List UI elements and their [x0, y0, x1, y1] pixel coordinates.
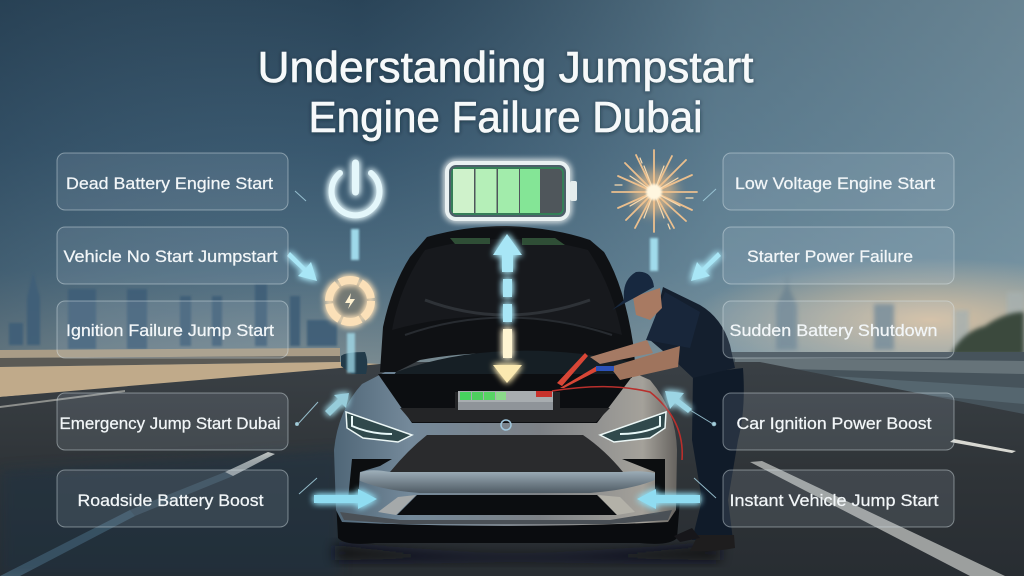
icon: battery level [447, 163, 577, 219]
jumper clamps and cables [557, 353, 588, 386]
label: instant vehicle [723, 470, 954, 527]
central down arrow [493, 329, 522, 383]
label: low voltage: Low Voltage Engine Start [735, 174, 935, 193]
label: dead battery: Dead Battery Engine Start [66, 174, 273, 193]
bumper and grille [390, 435, 623, 472]
mechanic [552, 272, 744, 551]
title: Engine Failure Dubai [308, 93, 702, 142]
label: emergency jump start [57, 393, 288, 450]
label: ignition failure [57, 301, 288, 358]
label: dead battery [57, 153, 288, 210]
icon: power symbol [332, 163, 379, 215]
connector arrows [287, 189, 721, 509]
battery in engine bay [458, 391, 553, 410]
shirt [650, 287, 735, 378]
boots [690, 535, 735, 551]
label: sudden battery [723, 301, 954, 358]
panel: right labels [723, 153, 954, 527]
right headlight [600, 412, 666, 442]
arrow: ignition power to car [665, 391, 692, 413]
label: vehicle no start [57, 227, 288, 284]
left headlight [346, 412, 412, 442]
engine bay [378, 374, 634, 423]
connector ticks [295, 189, 716, 498]
car [334, 226, 680, 544]
title [258, 43, 754, 142]
car wheels and underbody [336, 500, 680, 544]
label: starter power [723, 227, 954, 284]
windshield [392, 351, 632, 378]
label: low voltage [723, 153, 954, 210]
label: roadside battery boost: Roadside Battery Boost [78, 491, 264, 510]
central up arrow [493, 234, 522, 322]
title: Understanding Jumpstart [258, 43, 754, 92]
connector: gear to car [347, 333, 355, 373]
icon: ignition gear ring [329, 280, 371, 322]
icon: spark burst [612, 150, 697, 232]
arrow: instant jump start to car [637, 489, 700, 509]
emblem [501, 420, 511, 430]
label: sudden battery: Sudden Battery Shutdown [730, 321, 938, 340]
arrow: vehicle no start to gear [287, 252, 317, 281]
label: starter power: Starter Power Failure [747, 247, 913, 266]
head and cap [633, 288, 662, 320]
car body [334, 372, 677, 526]
label: vehicle no start: Vehicle No Start Jumpstart [64, 247, 278, 266]
label: instant vehicle: Instant Vehicle Jump Start [730, 491, 939, 510]
side mirror [341, 352, 367, 374]
label: emergency jump start: Emergency Jump Start Dubai [60, 414, 280, 433]
arms [590, 340, 653, 364]
trousers [692, 368, 744, 540]
arrow: roadside boost to car [314, 489, 377, 509]
label: ignition failure: Ignition Failure Jump Start [66, 321, 274, 340]
arrow: starter power to centre [691, 252, 721, 281]
connector: power to gear [351, 229, 359, 260]
label: roadside battery boost [57, 470, 288, 527]
arrow: emergency to car [325, 393, 349, 416]
hood [380, 226, 636, 372]
connector: spark to centre [650, 238, 658, 271]
panel: left labels [57, 153, 288, 527]
label: car ignition: Car Ignition Power Boost [736, 414, 932, 433]
label: car ignition [723, 393, 954, 450]
